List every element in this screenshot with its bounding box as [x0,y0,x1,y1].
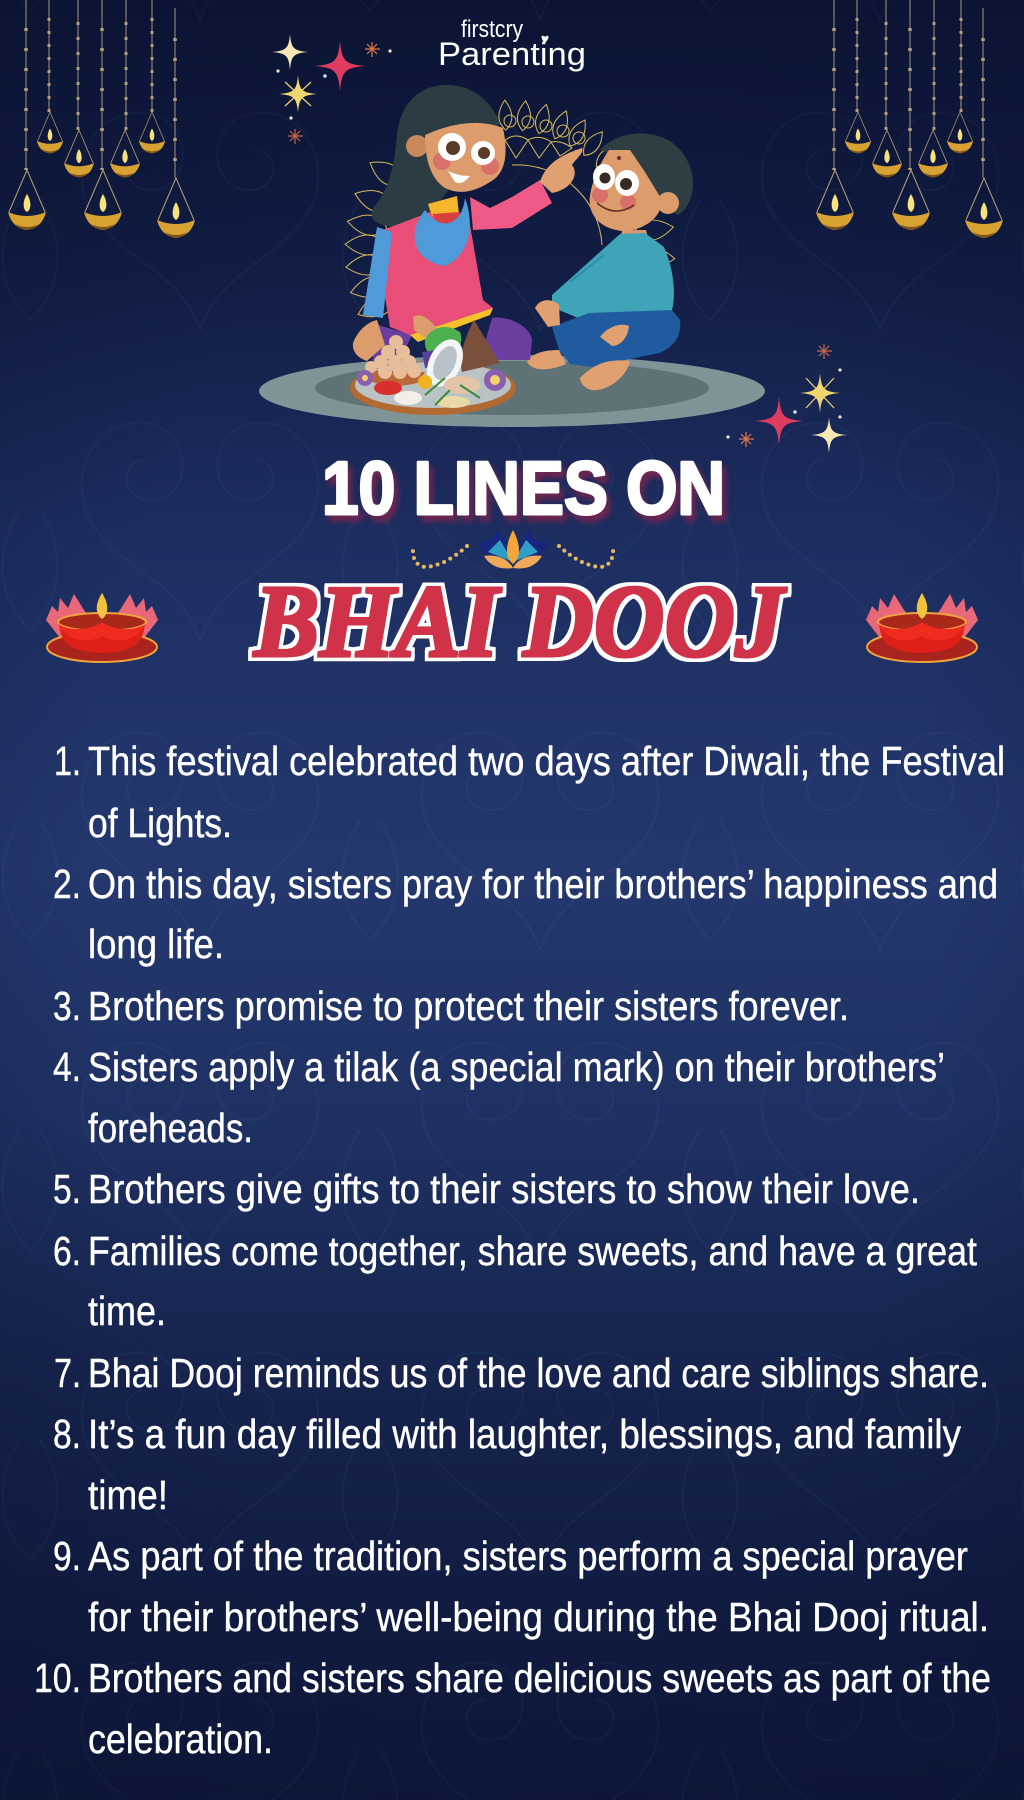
line item 7: 7. [54,1350,81,1396]
line item 8 [53,1411,961,1518]
line item 10: celebration. [88,1716,273,1762]
line item 1 [54,738,1005,846]
line item 2 [53,861,998,967]
icon: red diya right [866,593,978,662]
logo: firstcry parenting: firstcry [461,16,523,43]
sparkles: top left [272,34,392,144]
hanging diyas: right cluster [816,0,1003,238]
icon: hanging diya 9 [845,0,871,153]
line item 1: 1. [54,738,81,784]
icon: hanging diya 6 [139,0,165,153]
line item 1: of Lights. [88,800,232,846]
icon: lotus with bead flourishes [413,530,613,568]
sparkles: lower right [726,344,847,453]
line item 9 [53,1533,989,1640]
line item 2: 2. [53,861,81,907]
line item 10: 10. [34,1655,81,1701]
line item 5: 5. [53,1166,81,1212]
logo: firstcry parenting: Parenting [438,36,586,72]
icon: red diya left [46,593,158,662]
icon: hanging diya 5 [110,0,140,177]
line item 4: foreheads. [88,1105,253,1151]
icon: hanging diya 11 [892,0,930,230]
line item 8: 8. [53,1411,81,1457]
line item 4 [53,1044,945,1151]
icon: hanging diya 2 [37,0,63,153]
floor mat [259,355,765,427]
line item 5: Brothers give gifts to their sisters to show their love. [88,1166,920,1212]
title: 10 lines on: 10 LINES ON [322,446,725,530]
icon: hanging diya 10 [872,0,902,177]
icon: hanging diya 4 [84,0,122,230]
icon: hanging diya 7 [157,8,195,238]
hanging diyas: left cluster [8,0,195,238]
title: bhai dooj: BHAI DOOJ [253,564,787,679]
boy [527,134,693,390]
icon: hanging diya 3 [64,0,94,177]
line item 3: Brothers promise to protect their sisters forever. [88,983,849,1029]
line item 6: time. [88,1288,166,1334]
puja thali [350,320,516,415]
line item 6: 6. [53,1228,81,1274]
line item 8: time! [88,1472,168,1518]
line item 2: long life. [88,921,224,967]
line item 10 [34,1655,991,1762]
icon: hanging diya 1 [8,0,46,230]
girl [353,85,583,362]
line item 4: 4. [53,1044,81,1090]
mandala outline behind figures [345,100,675,324]
icon: hanging diya 14 [965,8,1003,238]
illustration: brother and sister tilak scene [259,85,765,427]
numbered list [34,738,1005,1762]
logo: firstcry parenting [438,16,586,72]
line item 6 [53,1228,978,1334]
line item 3: 3. [53,983,81,1029]
icon: hanging diya 13 [947,0,973,153]
icon: hanging diya 8 [816,0,854,230]
icon: hanging diya 12 [918,0,948,177]
line item 9: 9. [53,1533,81,1579]
